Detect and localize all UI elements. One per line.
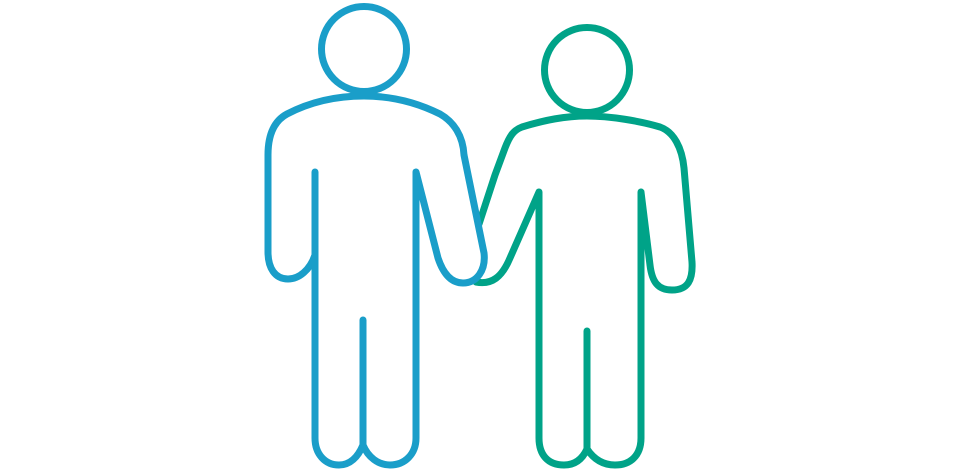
green leg divider (584, 331, 590, 449)
figure: blue person (268, 6, 484, 465)
blue leg divider (360, 320, 366, 445)
blue head (322, 6, 406, 92)
blue body outline (268, 96, 484, 465)
figure: green person (476, 28, 692, 465)
green head (544, 28, 630, 112)
green body outline (476, 116, 692, 465)
